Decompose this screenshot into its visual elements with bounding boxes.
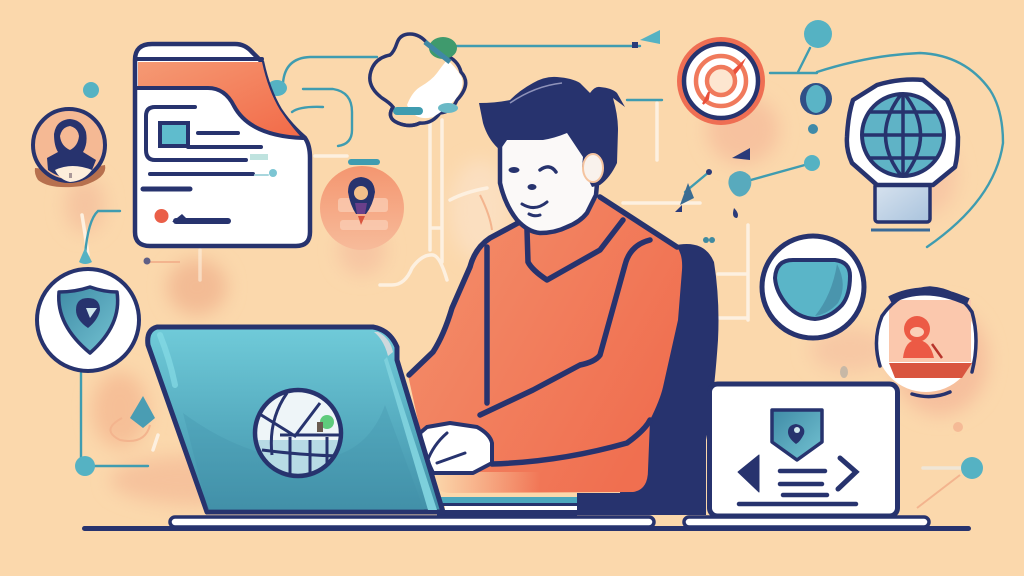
fingers [427, 433, 465, 463]
laptop screen [148, 327, 443, 512]
small navy accents [144, 42, 963, 432]
hand [420, 423, 492, 473]
icon: shield badge [37, 269, 139, 371]
hair highlight [510, 83, 562, 103]
laptop lid shading [183, 405, 424, 510]
main laptop [148, 327, 577, 516]
icon: user badge [33, 109, 105, 187]
icon: pill badge [762, 236, 864, 338]
icon: target [677, 37, 765, 125]
sweater outlines [409, 197, 677, 464]
document text block [143, 107, 277, 223]
nose [528, 184, 536, 190]
shield [772, 410, 822, 460]
smile [522, 202, 547, 216]
orange thin lines [110, 195, 960, 508]
background glows [65, 96, 988, 505]
laptop base [437, 497, 577, 516]
hair [479, 77, 625, 187]
sweater [408, 197, 682, 493]
desk [82, 517, 971, 531]
globe [255, 390, 342, 478]
sweater fade [432, 472, 540, 493]
chair [577, 244, 718, 515]
face [500, 110, 600, 233]
connector dots [75, 20, 983, 479]
document fold outlines [136, 59, 303, 138]
arrows [738, 455, 759, 492]
icon: cloud [370, 34, 466, 126]
text lines [739, 471, 856, 504]
connector lines [81, 46, 1003, 466]
icon: picture badge [876, 288, 976, 397]
icon: light bulb badge [320, 166, 404, 250]
panel: document card [135, 44, 310, 246]
ear [583, 154, 603, 182]
circuit lines [82, 103, 960, 468]
small laptop [710, 384, 898, 516]
document header fold [138, 62, 301, 137]
person [408, 77, 682, 493]
icon: small capsule [800, 83, 832, 134]
icon: globe badge [847, 80, 958, 230]
eyes [508, 167, 556, 173]
